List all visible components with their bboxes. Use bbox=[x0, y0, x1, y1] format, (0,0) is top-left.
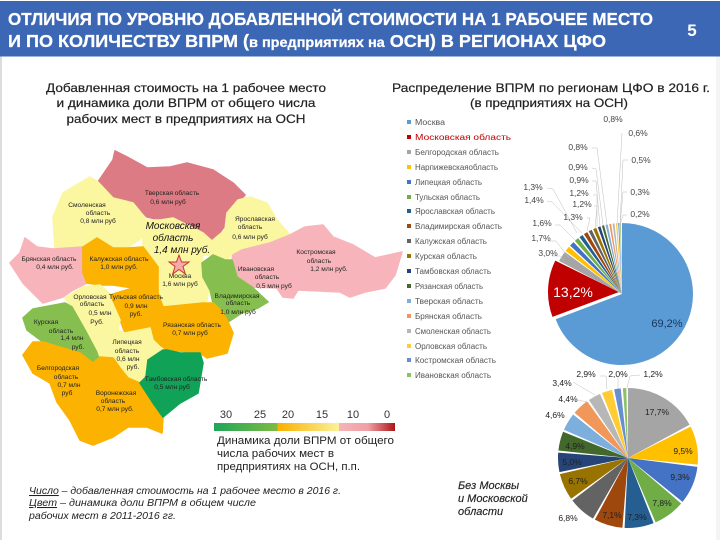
pie legend: Смоленская область bbox=[415, 327, 491, 336]
map labels: Орловская bbox=[73, 294, 107, 301]
header banner: И ПО КОЛИЧЕСТВУ ВПРМ ( в предприятиях на ОСН) В РЕГИОНАХ ЦФО bbox=[8, 31, 606, 51]
color scale legend: 0 bbox=[384, 409, 390, 421]
color scale legend: 25 bbox=[254, 409, 266, 421]
pie legend: Ивановская область bbox=[415, 371, 491, 380]
pie legend: Тамбовская область bbox=[415, 267, 491, 276]
pie legend: Белгородская область bbox=[415, 148, 499, 157]
note: without Moscow: Без Москвы bbox=[458, 480, 519, 492]
leader lines and small labels: 1,4% bbox=[524, 195, 544, 205]
pie legend: Липецкая область bbox=[415, 178, 482, 187]
map labels: область bbox=[101, 397, 126, 405]
pie legend: Нарпижевскаяобласть bbox=[415, 163, 498, 172]
pie legend: Московская область bbox=[415, 133, 511, 142]
map labels: 0,7 млн bbox=[57, 382, 81, 389]
pie legend: Тульская область bbox=[415, 193, 480, 202]
leader lines and small labels: 0,5% bbox=[631, 155, 651, 165]
leader lines and small labels: 0,3% bbox=[630, 187, 650, 197]
note: without Moscow: и Московской bbox=[458, 493, 528, 505]
footnote: Число – добавленная стоимость на 1 рабочее место в 2016 г. bbox=[29, 485, 341, 497]
map labels: Рязанская область bbox=[163, 321, 222, 329]
map labels: Тульская область bbox=[109, 293, 164, 301]
region: Tver bbox=[98, 151, 245, 242]
Moscow oblast callout: 1,4 млн руб. bbox=[154, 244, 210, 256]
map labels: Владимирская bbox=[215, 293, 260, 300]
second pie labels: 9,3% bbox=[670, 472, 690, 482]
note: without Moscow: области bbox=[458, 506, 503, 518]
map labels: 1,4 млн bbox=[60, 335, 84, 342]
map labels: 1,0 млн руб bbox=[220, 308, 256, 316]
map labels: Воронежская bbox=[96, 390, 137, 397]
leader lines and small labels: 0,6% bbox=[628, 128, 648, 138]
pie value labels: 13,2% bbox=[553, 284, 593, 300]
color scale legend: 15 bbox=[316, 409, 328, 421]
map heading bbox=[46, 81, 326, 126]
footnote: Цвет – динамика доли ВПРМ в общем числе bbox=[29, 497, 256, 509]
header banner bbox=[0, 1, 720, 56]
second pie labels bbox=[545, 369, 693, 523]
region: Ryazan bbox=[150, 303, 233, 358]
map labels: 0,7 млн руб. bbox=[96, 405, 134, 413]
color scale legend: 10 bbox=[347, 409, 359, 421]
second pie labels: 9,5% bbox=[673, 446, 693, 456]
map labels: Белгородская bbox=[37, 365, 80, 372]
map labels: 1,0 млн руб. bbox=[100, 263, 138, 271]
map labels: 0,6 млн bbox=[116, 356, 140, 363]
leader lines and small labels: 0,9% bbox=[569, 175, 589, 185]
map labels: Тверская область bbox=[145, 189, 200, 197]
region: Ivanovo bbox=[232, 243, 298, 298]
second pie labels: 7,1% bbox=[602, 510, 622, 520]
leader lines and small labels: 0,8% bbox=[603, 114, 623, 124]
map labels: Курская bbox=[34, 319, 59, 326]
header banner: ОТЛИЧИЯ ПО УРОВНЮ ДОБАВЛЕННОЙ СТОИМОСТИ НА 1 РАБОЧЕЕ МЕСТО bbox=[8, 8, 653, 29]
Moscow oblast callout: Московская bbox=[146, 221, 201, 232]
region: Orel bbox=[65, 285, 120, 348]
map labels: 0,6 млн руб bbox=[232, 233, 268, 241]
map labels: 1,2 млн руб. bbox=[310, 265, 348, 273]
map labels: Ярославская bbox=[235, 216, 275, 223]
color scale legend: 20 bbox=[282, 409, 294, 421]
leader lines and small labels: 1,6% bbox=[532, 218, 552, 228]
map labels: область bbox=[238, 223, 263, 231]
leader lines and small labels: 0,8% bbox=[568, 142, 588, 152]
right heading bbox=[392, 81, 710, 110]
right heading: (в предприятиях на ОСН) bbox=[470, 96, 628, 110]
pie legend: Владимирская область bbox=[415, 222, 502, 231]
map labels: Липецкая bbox=[112, 339, 142, 346]
pie legend bbox=[407, 118, 511, 380]
map heading: рабочих мест в предприятиях на ОСН bbox=[66, 112, 306, 126]
map labels: область bbox=[255, 273, 280, 281]
second pie labels: 7,3% bbox=[627, 512, 647, 522]
second pie labels: 1,2% bbox=[643, 369, 663, 379]
color scale legend: предприятиях на ОСН, п.п. bbox=[217, 461, 360, 473]
map of regions bbox=[10, 151, 402, 445]
map labels: Брянская область bbox=[22, 255, 77, 263]
map labels: Калужская область bbox=[90, 255, 149, 263]
region: Kostroma bbox=[270, 225, 402, 297]
second pie labels: 4,9% bbox=[565, 441, 585, 451]
map labels: Москва bbox=[169, 273, 192, 280]
second pie labels: 2,0% bbox=[608, 369, 628, 379]
map labels: Тамбовская область bbox=[145, 375, 208, 383]
map labels: область bbox=[226, 299, 251, 307]
region: Belgorod bbox=[23, 342, 100, 420]
map labels: Смоленская bbox=[68, 202, 106, 209]
region: Yaroslavl bbox=[213, 197, 290, 260]
map labels: Ивановская bbox=[238, 266, 274, 273]
map labels: область bbox=[49, 327, 74, 335]
pie legend: Москва bbox=[415, 118, 446, 127]
color scale legend: числа рабочих мест в bbox=[217, 448, 334, 460]
pie legend: Курская область bbox=[415, 252, 477, 261]
map labels: Костромская bbox=[296, 249, 336, 256]
region: Lipetsk bbox=[97, 328, 163, 383]
map labels: 0,5 млн bbox=[88, 310, 112, 317]
region: Voronezh bbox=[70, 357, 163, 445]
leader lines and small labels: 1,3% bbox=[563, 212, 583, 222]
map labels: руб. bbox=[127, 363, 139, 371]
second pie labels: 3,4% bbox=[552, 378, 572, 388]
footnote: рабочих мест в 2011-2016 гг. bbox=[28, 510, 176, 522]
second pie labels: 4,4% bbox=[558, 394, 578, 404]
pie legend: Орловская область bbox=[415, 342, 487, 351]
pie legend: Брянская область bbox=[415, 312, 482, 321]
leader lines and small labels: 3,0% bbox=[538, 248, 558, 258]
second pie labels: 4,6% bbox=[545, 410, 565, 420]
map labels: руб bbox=[62, 389, 73, 397]
map labels: область bbox=[307, 257, 332, 265]
map labels: 0,6 млн руб bbox=[150, 198, 186, 206]
map labels: 0,8 млн руб bbox=[80, 217, 116, 225]
second pie labels: 5,0% bbox=[562, 457, 582, 467]
note: without Moscow bbox=[458, 480, 528, 518]
map labels: 0,9 млн bbox=[124, 303, 148, 310]
region: Kursk bbox=[23, 303, 100, 363]
right heading: Распределение ВПРМ по регионам ЦФО в 2016 г. bbox=[392, 81, 710, 95]
leader lines and small labels bbox=[523, 114, 651, 262]
color scale legend: 30 bbox=[220, 409, 232, 421]
leader lines and small labels: 1,2% bbox=[569, 188, 589, 198]
second pie labels: 2,9% bbox=[576, 369, 596, 379]
pie value labels bbox=[553, 284, 683, 330]
region: Smolensk bbox=[53, 177, 147, 248]
leader lines and small labels: 0,9% bbox=[568, 162, 588, 172]
map labels: область bbox=[115, 347, 140, 355]
map labels: руб. bbox=[72, 343, 84, 351]
color scale legend bbox=[214, 409, 395, 473]
map labels: область bbox=[54, 373, 79, 381]
leader lines and small labels: 1,3% bbox=[523, 182, 543, 192]
footnote bbox=[28, 485, 341, 522]
region: Kaluga bbox=[83, 238, 158, 293]
icon: star for Moscow bbox=[169, 255, 189, 274]
map labels bbox=[22, 189, 348, 413]
second pie labels: 7,8% bbox=[652, 498, 672, 508]
map labels: 0,7 млн руб bbox=[172, 329, 208, 337]
map labels: область bbox=[86, 209, 111, 217]
map labels: область bbox=[80, 300, 105, 308]
leader lines and small labels: 1,2% bbox=[572, 199, 592, 209]
Moscow oblast callout: область bbox=[153, 232, 193, 244]
second pie labels: 6,8% bbox=[558, 513, 578, 523]
color scale legend: Динамика доли ВПРМ от общего bbox=[217, 435, 394, 447]
region: Moscow oblast bbox=[143, 218, 213, 307]
map heading: и динамика доли ВПРМ от общего числа bbox=[56, 96, 316, 110]
region: Tula bbox=[100, 285, 163, 333]
map labels: руб. bbox=[130, 310, 142, 318]
map labels: 0,5 млн руб bbox=[256, 282, 292, 290]
region: Tambov bbox=[140, 350, 203, 417]
leader lines and small labels: 1,7% bbox=[531, 233, 551, 243]
map labels: 0,4 млн руб. bbox=[36, 263, 74, 271]
pie legend: Ярославская область bbox=[415, 207, 495, 216]
map labels: 0,5 млн руб bbox=[154, 383, 190, 391]
map labels: Руб. bbox=[90, 318, 104, 326]
map heading: Добавленная стоимость на 1 рабочее место bbox=[46, 81, 326, 95]
pie legend: Рязанская область bbox=[415, 282, 483, 291]
pie legend: Тверская область bbox=[415, 297, 483, 306]
second pie labels: 6,7% bbox=[568, 476, 588, 486]
pie legend: Калужская область bbox=[415, 237, 487, 246]
Moscow oblast callout bbox=[146, 221, 210, 256]
pie chart: all regions bbox=[584, 256, 658, 330]
second pie labels: 17,7% bbox=[645, 407, 669, 417]
pie value labels: 69,2% bbox=[651, 318, 683, 330]
pie chart: without Moscow and Moscow oblast bbox=[593, 423, 663, 493]
header banner: 5 bbox=[687, 21, 697, 40]
pie legend: Костромская область bbox=[415, 356, 496, 365]
map labels: 1,6 млн руб bbox=[162, 280, 198, 288]
leader lines and small labels: 0,2% bbox=[630, 209, 650, 219]
region: Vladimir bbox=[202, 255, 268, 322]
region: Bryansk bbox=[10, 238, 87, 303]
